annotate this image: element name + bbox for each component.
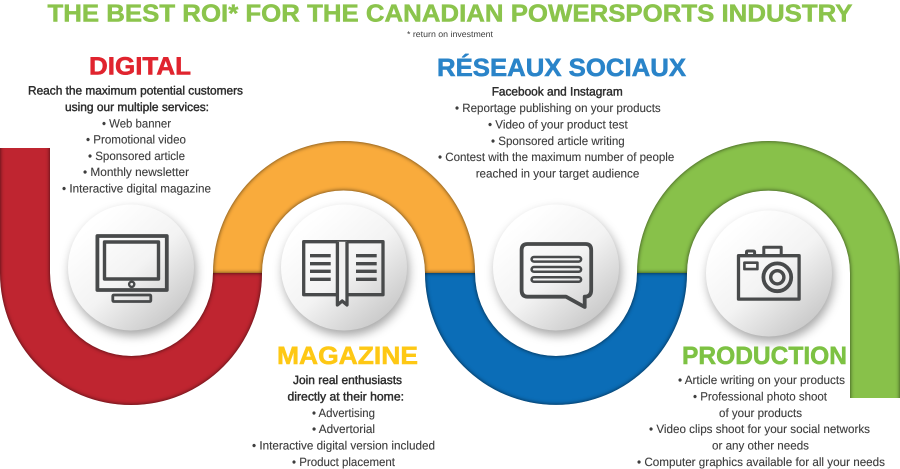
heading: reseaux sociaux: RÉSEAUX SOCIAUX (437, 53, 686, 82)
heading: digital: DIGITAL (89, 53, 191, 81)
icon: monitor (97, 236, 167, 302)
digital description (28, 84, 243, 196)
icon: camera (738, 247, 799, 299)
production description (637, 373, 885, 469)
band: blue (425, 273, 687, 405)
digital description: • Web banner (102, 116, 171, 130)
digital description: • Interactive digital magazine (62, 182, 211, 196)
wave ribbon (0, 130, 900, 415)
reseaux description: Facebook and Instagram (492, 84, 623, 98)
band: green (637, 141, 900, 415)
icon: open book (304, 242, 383, 305)
reseaux description: • Sponsored article writing (491, 134, 625, 148)
title: THE BEST ROI* FOR THE CANADIAN POWERSPORTS INDUSTRY (48, 1, 852, 28)
footnote: * return on investment (407, 29, 494, 39)
icon: speech bubble (522, 244, 591, 307)
production description: • Professional photo shoot (693, 390, 828, 404)
production description: • Video clips shoot for your social networks (649, 422, 870, 436)
digital description: • Sponsored article (88, 149, 185, 163)
reseaux description: • Contest with the maximum number of people (438, 150, 675, 164)
production description: or any other needs (712, 438, 809, 452)
reseaux description: reached in your target audience (476, 166, 640, 180)
panel: reseaux sociaux text (437, 53, 686, 180)
production description: of your products (719, 406, 802, 420)
magazine description: directly at their home: (288, 390, 404, 404)
magazine description: • Advertorial (312, 422, 375, 436)
reseaux description: • Reportage publishing on your products (455, 101, 661, 115)
production description: • Article writing on your products (678, 373, 845, 387)
panel: production text (637, 342, 885, 469)
production description: • Computer graphics available for all your needs (637, 455, 885, 469)
panel: digital text (28, 53, 243, 196)
band: red (0, 130, 262, 405)
band: orange (213, 141, 475, 273)
magazine description: • Advertising (312, 406, 375, 420)
digital description: • Promotional video (86, 132, 186, 146)
reseaux description (438, 84, 675, 180)
digital description: Reach the maximum potential customers (28, 84, 243, 98)
magazine description: Join real enthusiasts (293, 373, 402, 387)
icon disc: production (706, 210, 832, 336)
heading: production: PRODUCTION (682, 342, 847, 370)
reseaux description: • Video of your product test (488, 118, 628, 132)
panel: magazine text (252, 342, 435, 469)
magazine description (252, 373, 435, 469)
magazine description: • Interactive digital version included (252, 438, 435, 452)
icon disc: social (493, 204, 619, 330)
heading: magazine: MAGAZINE (277, 342, 418, 370)
icon disc: magazine (281, 204, 407, 330)
magazine description: • Product placement (292, 455, 396, 469)
digital description: • Monthly newsletter (83, 165, 189, 179)
icon disc: monitor (68, 204, 194, 330)
digital description: using our multiple services: (65, 100, 209, 114)
